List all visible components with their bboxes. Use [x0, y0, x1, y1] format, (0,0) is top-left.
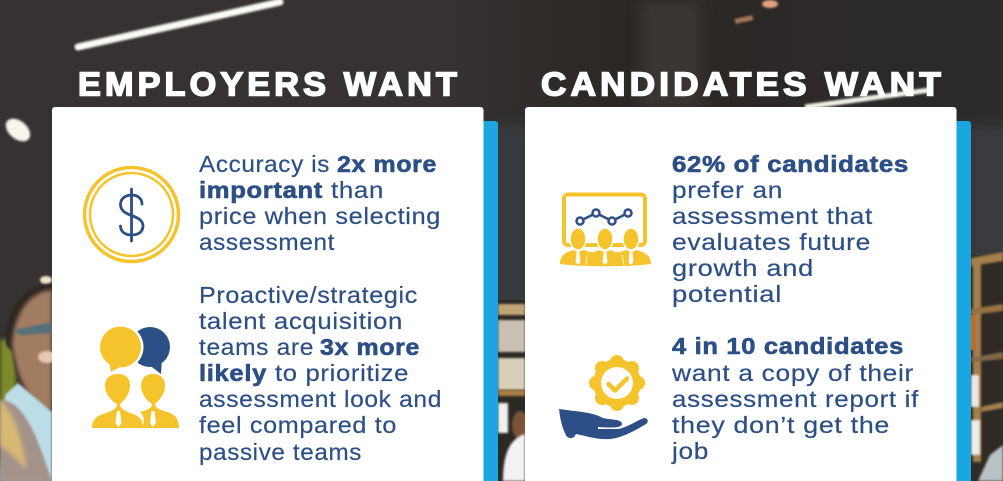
icon: dollar coin	[84, 168, 178, 262]
text: accuracy stat: price when selecting	[199, 203, 441, 229]
icon: audience at chart board	[560, 194, 651, 266]
text: 62 percent stat: prefer an	[672, 177, 783, 203]
text: accuracy stat: important	[199, 177, 323, 203]
centre shelves	[498, 300, 528, 481]
text: accuracy stat	[199, 151, 441, 255]
text: proactive teams stat: passive teams	[199, 439, 362, 465]
blue accent bar right	[943, 121, 971, 481]
text: proactive teams stat: 3x more	[320, 334, 420, 360]
text: 4 in 10 stat: 4 in 10 candidates	[672, 333, 904, 359]
right shelves	[971, 252, 1003, 481]
text: 4 in 10 stat: they don’t get the	[672, 412, 890, 438]
text: 62 percent stat: growth and	[672, 255, 814, 281]
text: 62 percent stat: assessment that	[672, 203, 873, 229]
blue accent bar left	[470, 121, 498, 481]
text: proactive teams stat: Proactive/strategic	[199, 282, 418, 308]
icon: hand holding gear with check	[559, 355, 648, 439]
text: proactive teams stat: to prioritize	[275, 360, 409, 386]
text: proactive teams stat	[199, 282, 442, 465]
panel: employers want	[52, 107, 498, 481]
text: proactive teams stat: likely	[199, 360, 267, 386]
heading: candidates want: CANDIDATES WANT	[541, 66, 945, 102]
white card left	[52, 107, 484, 481]
white card right	[525, 107, 956, 481]
text: accuracy stat: Accuracy is	[199, 151, 330, 177]
text: 4 in 10 stat: job	[671, 438, 709, 464]
text: 4 in 10 stat: want a copy of their	[671, 360, 914, 386]
text: accuracy stat: 2x more	[337, 151, 437, 177]
text: 4 in 10 stat: assessment report if	[672, 386, 919, 412]
icon: two people with speech bubbles	[92, 324, 179, 428]
panel: candidates want	[525, 107, 971, 481]
text: proactive teams stat: feel compared to	[199, 412, 397, 438]
text: accuracy stat: assessment	[199, 229, 335, 255]
text: 4 in 10 stat	[671, 333, 919, 464]
text: proactive teams stat: teams are	[199, 334, 314, 360]
text: proactive teams stat: talent acquisition	[199, 308, 403, 334]
text: 62 percent stat: evaluates future	[672, 229, 871, 255]
left edge people	[0, 284, 56, 481]
heading: employers want: EMPLOYERS WANT	[78, 66, 461, 102]
text: 62 percent stat	[672, 151, 909, 307]
text: 62 percent stat: 62% of candidates	[672, 151, 909, 177]
text: accuracy stat: than	[331, 177, 384, 203]
text: proactive teams stat: assessment look and	[199, 386, 442, 412]
text: 62 percent stat: potential	[672, 281, 782, 307]
